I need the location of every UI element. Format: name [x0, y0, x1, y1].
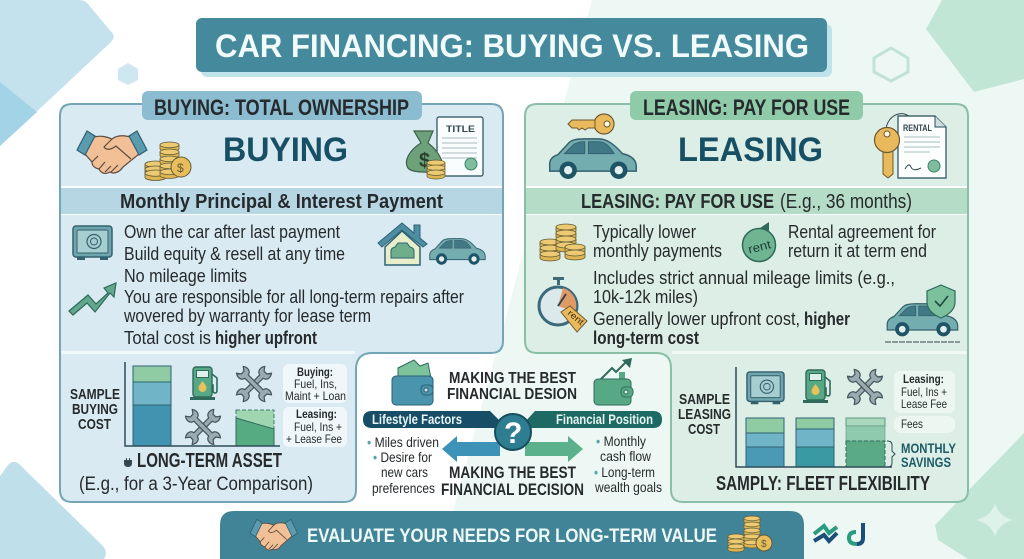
brace and monthly savings label: [887, 440, 957, 470]
chart label: SAMPLE: [679, 391, 730, 408]
buying benefits list: Total cost is: [124, 328, 211, 348]
leasing benefits list: 10k-12k miles): [593, 287, 698, 307]
icon: coins: $: [761, 539, 767, 550]
chart label: COST: [688, 421, 720, 438]
icon: green wallet with growth arrow: [594, 358, 633, 405]
icon: stopwatch with tag: [539, 277, 587, 332]
payment strip: Monthly Principal & Interest Payment: [120, 191, 443, 213]
bar 2: [796, 418, 834, 467]
icon: question circle: ?: [504, 417, 522, 450]
chart label: [70, 386, 120, 433]
icon: rising arrow: [69, 283, 116, 315]
lifestyle factors list: new cars: [381, 464, 428, 480]
buying benefits list: You are responsible for all long-term repairs after: [124, 287, 464, 307]
buying tag: BUYING: TOTAL OWNERSHIP: [154, 95, 409, 120]
title banner: CAR FINANCING: BUYING VS. LEASING: [215, 28, 809, 64]
icon: rent badge: rent: [747, 237, 773, 256]
buying benefits list: wovered by warranty for lease term: [123, 306, 371, 326]
legend: leasing: Leasing:: [296, 407, 337, 421]
financial position list: • Monthly: [596, 433, 646, 449]
lifestyle factors list: preferences: [372, 480, 435, 496]
arrow: left blue: [442, 436, 500, 462]
icon: coins: $: [177, 161, 184, 175]
footer text: EVALUATE YOUR NEEDS FOR LONG-TERM VALUE: [307, 526, 717, 547]
logo: zigzag mark: [814, 526, 837, 541]
long-term asset caption: LONG-TERM ASSET: [137, 450, 282, 472]
legend: leasing: [283, 407, 347, 447]
brace and monthly savings label: SAVINGS: [901, 454, 951, 470]
heading: buying: BUYING: [223, 131, 348, 169]
chart label: LEASING: [678, 406, 731, 423]
legend: fees: Fees: [901, 417, 923, 431]
heading: making the best financial desion: MAKING THE BEST: [449, 370, 576, 387]
legend: fees: [894, 416, 955, 433]
lifestyle factors list: • Desire for: [373, 449, 432, 465]
icon: safe: [747, 372, 784, 404]
financial position list: • Long-term: [594, 464, 655, 480]
arrow: right green: [525, 436, 583, 462]
title banner: [196, 18, 832, 77]
logo: letter mark: [849, 523, 863, 544]
leasing benefits list: Generally lower upfront cost,: [593, 309, 800, 329]
chart label: [678, 391, 731, 438]
icon: money bag and title document: $: [419, 150, 430, 172]
icon: handshake: [77, 131, 147, 173]
heading: making the best financial desion: [447, 370, 577, 403]
leasing benefits list: long-term cost: [593, 328, 699, 348]
icon: money bag and title document: [406, 117, 483, 179]
icon: fuel pump: [803, 370, 830, 403]
icon: safe: [73, 226, 112, 260]
icon: money bag and title document: TITLE: [446, 124, 475, 134]
icon: house with car: [378, 223, 485, 265]
legend: leasing: [894, 371, 955, 413]
leasing benefits list: monthly payments: [593, 241, 722, 261]
legend: leasing: Lease Fee: [901, 397, 947, 411]
leasing benefits list: higher: [804, 309, 850, 329]
heading: making the best financial decision: MAKING THE BEST: [449, 463, 576, 482]
leasing chart caption: SAMPLY: FLEET FLEXIBILITY: [716, 473, 931, 495]
icon: coins: [728, 516, 772, 552]
buying benefits list: No mileage limits: [124, 266, 247, 286]
banner: financial position: [523, 411, 662, 428]
panel: decision: [363, 358, 662, 499]
leasing benefits list: [593, 222, 936, 348]
icon: fuel pump: [190, 367, 217, 400]
long-term asset caption: (E.g., for a 3-Year Comparison): [79, 474, 313, 495]
chart label: SAMPLE: [70, 386, 120, 403]
icon: coins: [145, 142, 191, 180]
icon: key and rental document: [874, 114, 946, 178]
legend: leasing: + Lease Fee: [286, 432, 342, 446]
heading: leasing: LEASING: [678, 131, 823, 169]
heading: making the best financial decision: [441, 463, 584, 499]
icon: question circle: [495, 414, 531, 450]
leasing tag: LEASING: PAY FOR USE: [643, 95, 850, 120]
chart: sample leasing cost: [678, 367, 957, 470]
buying benefits list: higher upfront: [215, 328, 317, 348]
legend: leasing: Leasing:: [903, 372, 944, 386]
icon: stopwatch with tag: rent: [566, 308, 586, 327]
icon: small plug: [124, 458, 132, 467]
buying benefits list: [123, 222, 464, 348]
icon: wrench lower: [184, 408, 222, 446]
legend: buying: Buying:: [297, 365, 333, 379]
legend: buying: [283, 364, 347, 403]
banner: financial position: Financial Position: [556, 411, 653, 427]
icon: coin stacks: [540, 224, 585, 261]
chart: sample buying cost: [70, 362, 347, 447]
icon: wrench: [235, 365, 273, 403]
icon: car with shield: [885, 285, 960, 342]
banner: lifestyle factors: Lifestyle Factors: [372, 411, 462, 427]
lifestyle factors list: [367, 434, 439, 496]
buying benefits list: Build equity & resell at any time: [124, 244, 345, 264]
chart label: BUYING: [72, 401, 118, 418]
heading: making the best financial decision: FINANCIAL DECISION: [441, 480, 584, 499]
legend: buying: Fuel, Ins,: [294, 377, 337, 391]
icon: teal wallet with cash: [392, 360, 433, 405]
footer banner: [220, 511, 804, 559]
icon: wrench: [846, 368, 884, 406]
icon: rent badge: [742, 222, 776, 262]
panel: leasing: [525, 91, 968, 502]
bar: buying stacked: [133, 366, 171, 446]
long-term asset caption: [79, 450, 313, 495]
financial position list: [594, 433, 662, 495]
bar 3: [846, 418, 885, 467]
brace and monthly savings label: MONTHLY: [901, 440, 957, 456]
leasing strip: LEASING: PAY FOR USE: [581, 191, 774, 213]
lifestyle factors list: • Miles driven: [367, 434, 439, 450]
bar: leasing stacked: [236, 410, 274, 446]
leasing benefits list: return it at term end: [788, 241, 927, 261]
icon: car: [550, 139, 636, 179]
buying benefits list: Own the car after last payment: [124, 222, 340, 242]
leasing benefits list: Rental agreement for: [788, 222, 936, 242]
icon: key and rental document: RENTAL: [903, 123, 932, 133]
chart label: COST: [78, 416, 111, 433]
leasing benefits list: Includes strict annual mileage limits (e.g.,: [593, 268, 895, 288]
legend: buying: Maint + Loan: [285, 389, 346, 403]
bar 1: [746, 418, 784, 467]
panel: buying: [60, 91, 503, 502]
leasing strip: (E.g., 36 months): [780, 191, 912, 213]
legend: leasing: Fuel, Ins +: [901, 385, 947, 399]
leasing benefits list: Typically lower: [593, 222, 696, 242]
heading: making the best financial desion: FINANCIAL DESION: [447, 386, 577, 403]
legend: leasing: Fuel, Ins +: [294, 420, 342, 434]
financial position list: cash flow: [600, 448, 652, 464]
financial position list: wealth goals: [594, 479, 662, 495]
icon: gold key: [568, 114, 614, 134]
icon: handshake: [250, 519, 298, 550]
